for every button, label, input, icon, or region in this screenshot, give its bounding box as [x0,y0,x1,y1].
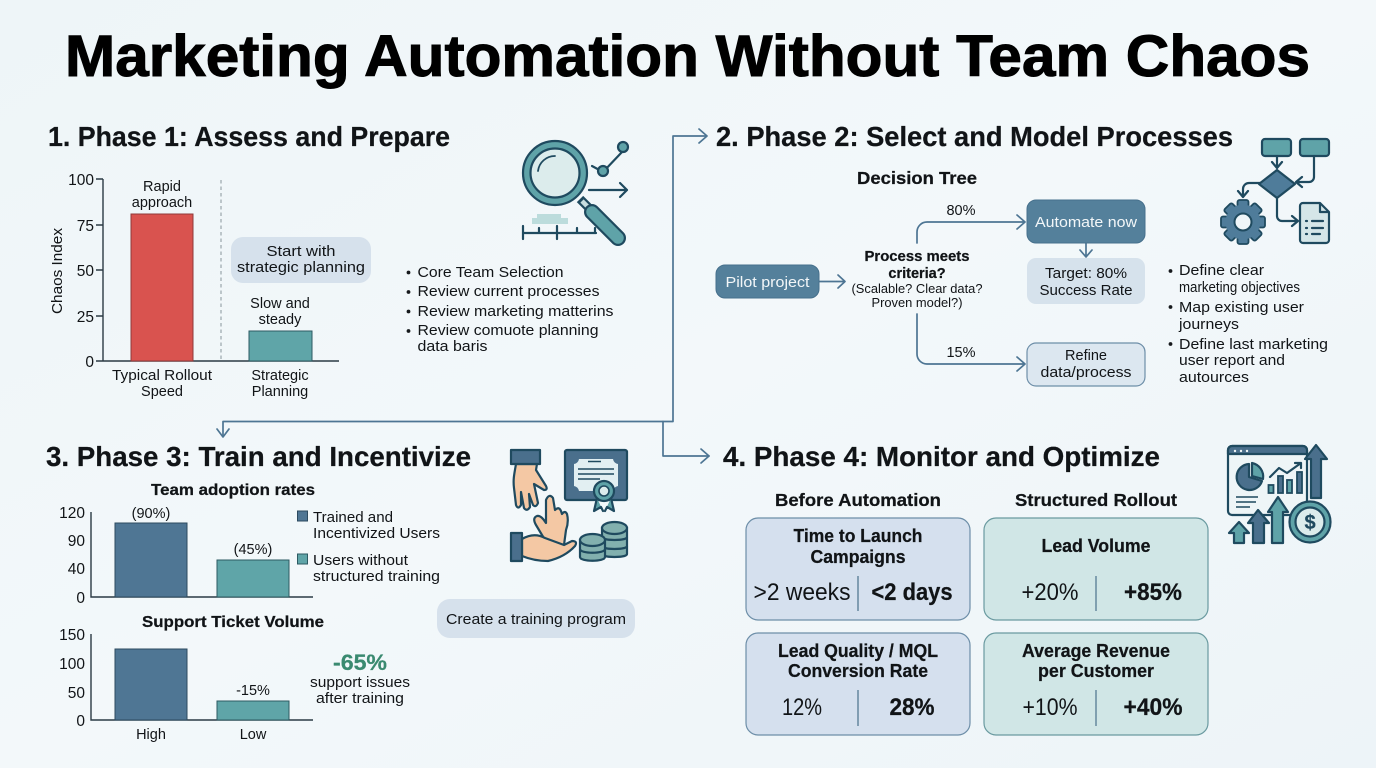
decision tree flowchart [716,200,1145,386]
node: process meets criteria: (Scalable? Clear data? [852,282,983,296]
panel: phase 4 [723,441,1330,735]
bullet list: phase 1: Review current processes [418,284,600,300]
bar chart: support ticket volume: High [136,727,166,743]
legend: adoption chart: structured training [313,569,440,585]
bar chart: chaos index: Planning [252,384,308,400]
bar chart: chaos index: 75 [77,218,94,235]
branch labels: 80% [946,203,976,219]
bar chart: support ticket volume: Low [240,727,267,743]
connector arrows between phases [217,129,709,463]
bullet list: phase 1: data baris [418,339,488,355]
column heading: structured rollout: Structured Rollout [1015,490,1177,510]
bar chart: team adoption rates: 120 [59,505,85,522]
bar chart: chaos index: Speed [141,384,183,400]
icon: analytics dashboard: $ [1304,512,1316,534]
node: automate now [1027,200,1145,243]
node: target success rate: Target: 80% [1045,266,1127,282]
legend: adoption chart: Incentivized Users [313,526,440,542]
bar chart: team adoption rates: 0 [76,590,85,607]
decision tree heading: Decision Tree [857,168,977,188]
bullet list: phase 2: Define clear [1179,263,1264,279]
bar chart: chaos index: 25 [77,309,94,326]
panel: phase 3 [46,441,635,743]
bar chart: chaos index: 0 [85,354,94,371]
bar chart: support ticket volume [59,614,324,743]
card: lead quality: 28% [890,694,934,721]
bullet list: phase 1: Review marketing matterins [418,304,614,320]
bar chart: team adoption rates: 40 [68,561,85,578]
title: Marketing Automation Without Team Chaos [65,24,1310,89]
panel: phase 1 [48,121,628,400]
branch labels: 15% [946,345,976,361]
bullet list: phase 2: marketing objectives [1179,280,1300,296]
bar chart: chaos index: Strategic [251,368,309,384]
node: refine data/process: data/process [1040,365,1132,381]
stat: support issues reduction [310,650,410,707]
card: lead quality: 12% [782,694,822,721]
bar chart: chaos index [49,172,339,400]
card: average revenue per customer: per Customer [1038,661,1154,681]
bullet list: phase 2: user report and [1179,353,1285,369]
node: target success rate: Success Rate [1040,283,1132,299]
card: time to launch campaigns: <2 days [872,579,952,606]
legend: adoption chart [298,510,440,585]
card: average revenue per customer: +10% [1022,694,1078,721]
legend: adoption chart: Users without [313,553,408,569]
bar chart: chaos index: 50 [77,263,94,280]
bar chart: support ticket volume: -15% [236,683,270,699]
icon: process flow [1221,139,1329,244]
bar chart: support ticket volume: 100 [59,656,85,673]
bar chart: chaos index: Typical Rollout [112,368,212,384]
card: time to launch campaigns: Time to Launch [794,526,922,546]
card: lead volume: Lead Volume [1042,536,1150,556]
card: average revenue per customer [984,633,1208,735]
bullet list: phase 2: journeys [1178,317,1239,333]
card: average revenue per customer: Average Revenue [1022,641,1170,661]
card: lead volume [984,518,1208,620]
card: lead volume: +85% [1124,579,1182,606]
bullet list: phase 2: Define last marketing [1179,337,1328,353]
bar chart: chaos index: Slow and [250,296,310,312]
bar chart: support ticket volume: 150 [59,627,85,644]
stat: support issues reduction: support issues [310,675,410,691]
bar chart: support ticket volume: Support Ticket Volume [142,614,324,631]
bar chart: team adoption rates: (90%) [132,506,170,522]
heading: phase 4: 4. Phase 4: Monitor and Optimize [723,441,1160,472]
node: pilot project [716,265,819,298]
bar chart: team adoption rates: 90 [68,533,85,550]
icon: analytics dashboard [1228,445,1330,543]
node: refine data/process: Refine [1065,348,1107,364]
card: lead quality: Lead Quality / MQL [778,641,938,661]
stat: support issues reduction: -65% [333,650,387,675]
bullet list: phase 1: Core Team Selection [418,265,564,281]
card: time to launch campaigns [746,518,970,620]
bullet list: phase 1 [407,265,614,355]
bar chart: team adoption rates [59,482,315,607]
node: process meets criteria: Process meets [864,249,970,265]
icon: magnifier with chart [523,141,628,239]
callout: start with strategic planning: strategic planning [237,260,365,276]
bar chart: team adoption rates: Team adoption rates [151,482,315,499]
bullet list: phase 2 [1169,263,1328,386]
bullet list: phase 2: autources [1179,370,1249,386]
node: process meets criteria: criteria? [888,266,946,282]
card: lead quality: Conversion Rate [788,661,928,681]
heading: phase 2: 2. Phase 2: Select and Model Processes [716,121,1233,152]
callout: start with strategic planning: Start with [266,244,336,260]
node: automate now: Automate now [1035,215,1138,231]
node: pilot project: Pilot project [726,275,810,291]
bar chart: chaos index: steady [259,312,302,328]
bullet list: phase 2: Map existing user [1179,300,1304,316]
bar chart: support ticket volume: 50 [68,685,85,702]
heading: phase 3: 3. Phase 3: Train and Incentivize [46,441,471,472]
node: process meets criteria: Proven model?) [872,296,962,310]
heading: phase 1: 1. Phase 1: Assess and Prepare [48,121,450,152]
callout: create a training program: Create a training program [446,612,626,628]
card: lead volume: +20% [1022,579,1078,606]
bar chart: chaos index: Chaos Index [49,228,66,314]
card: time to launch campaigns: Campaigns [810,547,906,567]
column heading: before automation: Before Automation [775,490,941,510]
bullet list: phase 1: Review comuote planning [418,323,598,339]
bar chart: chaos index: approach [132,195,192,211]
bar chart: chaos index: Rapid [143,179,181,195]
card: average revenue per customer: +40% [1124,694,1182,721]
panel: phase 2 [716,121,1329,386]
node: refine data/process [1027,343,1145,386]
callout: start with strategic planning [231,237,371,283]
branch labels [946,203,976,361]
icon: training and incentives [511,450,627,561]
bar chart: support ticket volume: 0 [76,713,85,730]
stat: support issues reduction: after training [316,691,404,707]
node: target success rate [1027,258,1145,304]
bar chart: team adoption rates: (45%) [234,542,272,558]
callout: create a training program [437,599,635,638]
card: time to launch campaigns: >2 weeks [754,579,850,606]
bar chart: chaos index: 100 [68,172,94,189]
card: lead quality [746,633,970,735]
node: process meets criteria [852,249,983,310]
legend: adoption chart: Trained and [313,510,393,526]
